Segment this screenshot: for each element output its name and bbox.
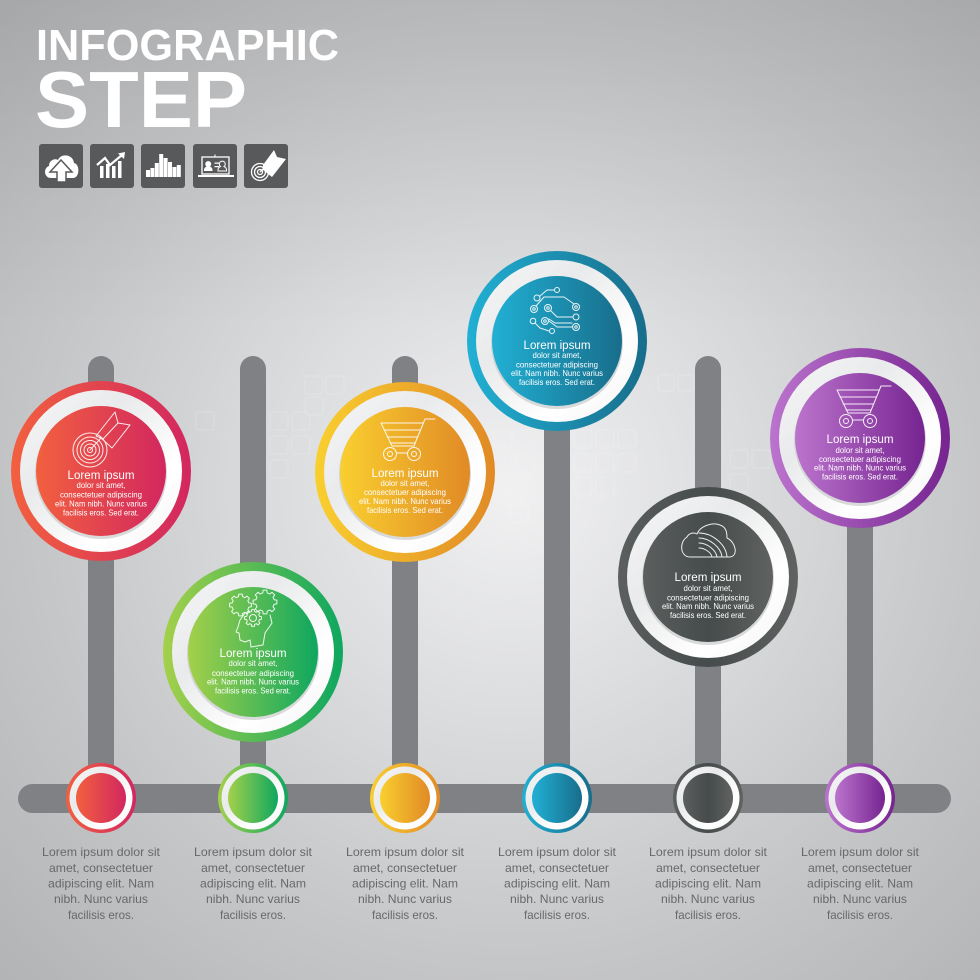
icon row: [39, 144, 288, 188]
panel: step 3 yellow circle: [315, 382, 495, 562]
step 2 stem: [240, 356, 266, 796]
step 5 stem: [695, 356, 721, 796]
caption: step 4: amet, consectetuer: [505, 861, 609, 875]
panel: step 2 green circle: [163, 562, 343, 742]
icon: shopping cart outline: [381, 419, 435, 460]
caption: step 3: adipiscing elit. Nam: [352, 876, 458, 890]
caption: step 3: [346, 845, 465, 922]
text: step 5: Lorem ipsum: [674, 572, 742, 584]
text: step 4: Lorem ipsum: [524, 340, 590, 352]
text: step 5: facilisis eros. Sed erat.: [670, 610, 746, 620]
caption: step 3: nibh. Nunc varius: [358, 892, 452, 906]
caption: step 1: [42, 845, 161, 922]
caption: step 1: facilisis eros.: [68, 908, 134, 922]
text: step 6: facilisis eros. Sed erat.: [822, 472, 898, 482]
caption: step 2: nibh. Nunc varius: [206, 892, 300, 906]
marker: step 5: [673, 763, 743, 833]
text: step 1: dolor sit amet,: [76, 480, 126, 490]
text: step 5: dolor sit amet,: [684, 583, 732, 593]
caption: step 3: amet, consectetuer: [353, 861, 457, 875]
caption: step 5: nibh. Nunc varius: [661, 892, 755, 906]
caption: step 6: amet, consectetuer: [808, 861, 912, 875]
text: step 1: elit. Nam nibh. Nunc varius: [55, 498, 147, 508]
text: step 5: [662, 572, 754, 620]
text: step 4: consectetuer adipiscing: [516, 360, 598, 370]
timeline bar: [18, 784, 951, 813]
text: step 6: Lorem ipsum: [826, 434, 894, 446]
caption: step 1: Lorem ipsum dolor sit: [42, 845, 161, 859]
caption: step 1: amet, consectetuer: [49, 861, 153, 875]
marker: step 4: [522, 763, 592, 833]
text: step 4: [511, 340, 603, 387]
caption: step 4: [498, 845, 617, 922]
icon: growth chart: [90, 144, 134, 188]
marker: step 1: [66, 763, 136, 833]
icon: target and arrow: [244, 144, 288, 188]
marker: step 2: [218, 763, 288, 833]
text: step 4: elit. Nam nibh. Nunc varius: [511, 368, 603, 378]
text: step 3: consectetuer adipiscing: [364, 487, 446, 497]
text: step 2: facilisis eros. Sed erat.: [215, 686, 291, 696]
caption: step 1: nibh. Nunc varius: [54, 892, 148, 906]
caption: step 3: Lorem ipsum dolor sit: [346, 845, 465, 859]
caption: step 2: Lorem ipsum dolor sit: [194, 845, 313, 859]
caption: step 6: facilisis eros.: [827, 908, 893, 922]
icon: laptop profile: [193, 144, 237, 188]
text: step 2: dolor sit amet,: [228, 658, 278, 668]
caption: step 5: facilisis eros.: [675, 908, 741, 922]
text: step 3: dolor sit amet,: [380, 478, 430, 488]
text: step 2: Lorem ipsum: [220, 648, 286, 660]
caption: step 4: facilisis eros.: [524, 908, 590, 922]
text: step 1: Lorem ipsum: [68, 470, 134, 482]
text: step 3: facilisis eros. Sed erat.: [367, 505, 443, 515]
caption: step 2: amet, consectetuer: [201, 861, 305, 875]
caption: step 6: nibh. Nunc varius: [813, 892, 907, 906]
text: step 5: consectetuer adipiscing: [667, 592, 749, 602]
step 3 stem: [392, 356, 418, 796]
caption: step 2: adipiscing elit. Nam: [200, 876, 306, 890]
step 6 stem: [847, 356, 873, 796]
text: step 1: consectetuer adipiscing: [60, 490, 142, 500]
icon: cloud upload: [39, 144, 83, 188]
caption: step 4: Lorem ipsum dolor sit: [498, 845, 617, 859]
text: step 3: Lorem ipsum: [372, 468, 438, 480]
text: step 3: [359, 468, 451, 515]
step 4 stem: [544, 356, 570, 796]
text: step 6: consectetuer adipiscing: [819, 454, 901, 464]
text: step 6: [814, 434, 906, 482]
step 1 stem: [88, 356, 114, 796]
marker: step 3: [370, 763, 440, 833]
title line: STEP: STEP: [35, 55, 247, 144]
caption: step 5: amet, consectetuer: [656, 861, 760, 875]
caption: step 2: [194, 845, 313, 922]
text: step 2: consectetuer adipiscing: [212, 668, 294, 678]
title: [35, 21, 339, 144]
caption: step 5: [649, 845, 768, 922]
panel: step 1 red circle: [11, 381, 191, 561]
text: step 1: facilisis eros. Sed erat.: [63, 508, 139, 518]
title line: INFOGRAPHIC: INFOGRAPHIC: [36, 21, 339, 70]
caption: step 6: [801, 845, 920, 922]
text: step 2: elit. Nam nibh. Nunc varius: [207, 676, 299, 686]
text: step 2: [207, 648, 299, 696]
caption: step 2: facilisis eros.: [220, 908, 286, 922]
caption: step 6: adipiscing elit. Nam: [807, 876, 913, 890]
caption: step 6: Lorem ipsum dolor sit: [801, 845, 920, 859]
icon: cloud with signal outline: [682, 524, 735, 557]
caption: step 5: Lorem ipsum dolor sit: [649, 845, 768, 859]
icon: circuit outline: [530, 288, 580, 334]
icon: target and arrow outline: [73, 412, 130, 467]
text: step 3: elit. Nam nibh. Nunc varius: [359, 496, 451, 506]
text: step 5: elit. Nam nibh. Nunc varius: [662, 601, 754, 611]
text: step 6: dolor sit amet,: [836, 445, 884, 455]
text: step 6: elit. Nam nibh. Nunc varius: [814, 462, 906, 472]
caption: step 3: facilisis eros.: [372, 908, 438, 922]
text: step 1: [55, 470, 147, 518]
caption: step 4: nibh. Nunc varius: [510, 892, 604, 906]
marker: step 6: [825, 763, 895, 833]
panel: step 5 dark circle: [618, 487, 798, 667]
icon: head with gears outline: [230, 590, 277, 647]
caption: step 5: adipiscing elit. Nam: [655, 876, 761, 890]
icon: shopping cart outline: [837, 386, 891, 428]
text: step 4: dolor sit amet,: [532, 350, 582, 360]
icon: bar chart: [141, 144, 185, 188]
panel: step 4 blue circle: [467, 251, 647, 431]
caption: step 4: adipiscing elit. Nam: [504, 876, 610, 890]
text: step 4: facilisis eros. Sed erat.: [519, 377, 595, 387]
caption: step 1: adipiscing elit. Nam: [48, 876, 154, 890]
panel: step 6 purple circle: [770, 348, 950, 528]
